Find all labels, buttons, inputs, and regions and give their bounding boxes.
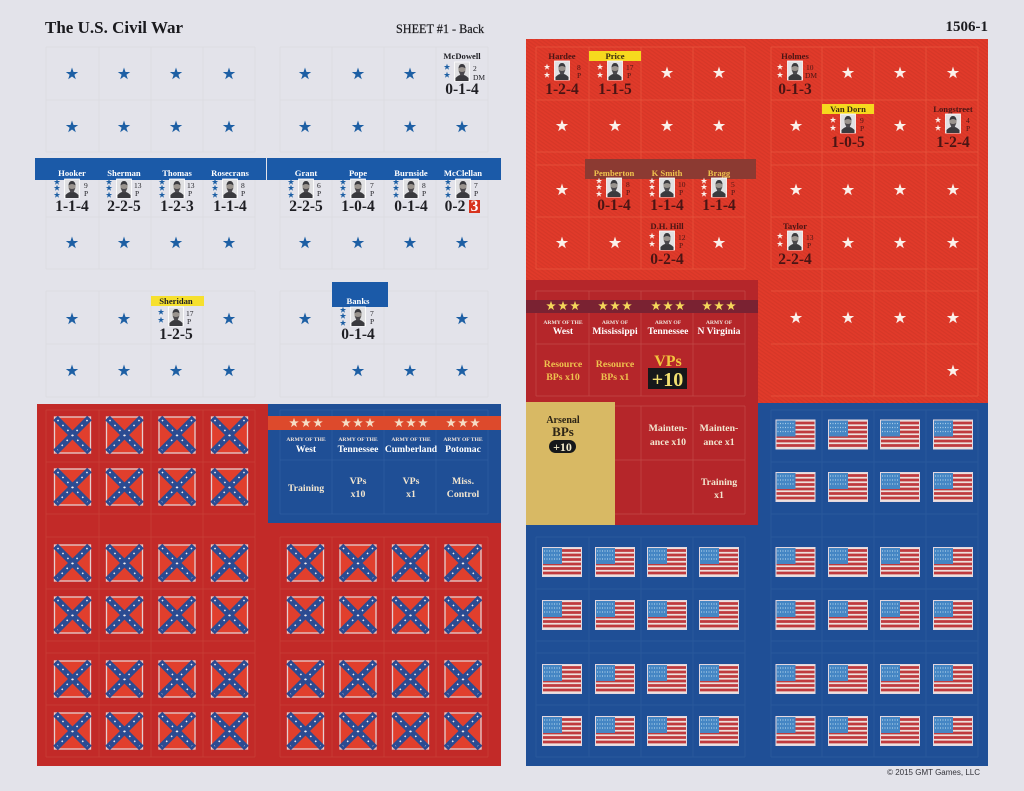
army column: Potomac [443, 418, 483, 500]
leader: Pemberton [594, 168, 635, 214]
Sheridan yellow banner [151, 296, 204, 306]
leader: Price: 1-1-5 [598, 81, 632, 98]
leader: Longstreet: 4 [966, 116, 970, 125]
leader: Sherman: 13 [134, 181, 142, 190]
leader: Rosecrans: Rosecrans [211, 168, 250, 178]
army column: West [543, 301, 583, 383]
leader: D.H. Hill [649, 221, 686, 268]
leader: Burnside: Burnside [394, 168, 428, 178]
army column: N Virginia: ARMY OF [706, 320, 733, 326]
army column: Potomac: ARMY OF THE [443, 437, 483, 443]
white star field [556, 66, 959, 376]
brown name band [585, 159, 756, 179]
Training x1 box: Training [701, 477, 737, 488]
leader: Van Dorn: 9 [860, 116, 864, 125]
Price yellow banner [589, 51, 641, 61]
panel: Confederate red leader counters [526, 39, 988, 404]
army column: Tennessee: VPs [350, 476, 367, 487]
leader: Pope [340, 168, 375, 215]
leader: Sherman [106, 168, 142, 215]
flag group: lower right [288, 545, 481, 749]
leader: Hooker: P [84, 189, 88, 198]
army column: West: BPs x10 [546, 372, 580, 383]
leader: Sheridan [158, 296, 194, 343]
Maintenance x1 box: ance x1 [703, 437, 735, 448]
leader: Taylor: P [807, 241, 811, 250]
leader: Burnside: 8 [422, 181, 426, 190]
flag group: top four by two [54, 417, 248, 505]
leader: McDowell: 2 [473, 64, 477, 73]
leader: McDowell: McDowell [443, 51, 481, 61]
army column: Tennessee: +10 [652, 369, 683, 391]
army column: Mississippi [592, 301, 638, 383]
leader: Sheridan: 1-2-5 [159, 326, 193, 343]
leader: Holmes [777, 51, 817, 98]
leader: Grant: P [317, 189, 321, 198]
copyright: © 2015 GMT Games, LLC [887, 768, 980, 777]
leader: Hardee [544, 51, 581, 98]
leader: Banks: 0-1-4 [341, 326, 375, 343]
panel: Confederate flags [37, 404, 501, 766]
leader: Grant: 6 [317, 181, 321, 190]
army column: Mississippi: Resource [596, 359, 635, 370]
panel: Arsenal tan counter [526, 402, 615, 525]
leader: Sheridan: Sheridan [159, 296, 193, 306]
leader: Thomas: 1-2-3 [160, 198, 194, 215]
panel: Confederate army markers [526, 280, 758, 525]
sheet number: 1506-1 [946, 19, 988, 35]
panel: Arsenal tan counter: BPs [552, 424, 574, 439]
leader: Sheridan: 17 [186, 309, 194, 318]
blue name banner left [35, 158, 266, 180]
leader: Longstreet [933, 104, 973, 151]
army column: West: Resource [544, 359, 583, 370]
leader: Longstreet: Longstreet [933, 104, 973, 114]
leader: Sheridan: P [187, 317, 191, 326]
Maintenance x1 box: Mainten- [700, 423, 738, 434]
army column: Potomac: Potomac [445, 444, 482, 455]
leader: Taylor [777, 221, 814, 268]
leader: Taylor: 13 [806, 233, 814, 242]
leader: Pope: 7 [370, 181, 374, 190]
leader: McClellan: 3 [471, 198, 479, 215]
leader: Price: Price [605, 51, 625, 61]
title: The U.S. Civil War [45, 18, 184, 37]
army column: Potomac: Control [447, 489, 480, 500]
leader: Bragg [701, 168, 736, 214]
Training x1 box [701, 477, 737, 501]
panel: Union leader counters [35, 47, 501, 397]
leader: Bragg: Bragg [708, 168, 731, 178]
army column: Tennessee [648, 301, 689, 391]
army column: Cumberland: ARMY OF THE [391, 437, 431, 443]
leader: Bragg: P [731, 188, 735, 197]
leader: Price: P [627, 71, 631, 80]
panel: Union army markers [268, 404, 501, 523]
leader: Pope: Pope [349, 168, 367, 178]
army column: Tennessee: Tennessee [648, 326, 689, 337]
leader: Holmes: 0-1-3 [778, 81, 812, 98]
panel: Arsenal tan counter: +10 [553, 440, 572, 454]
leader: Pemberton: Pemberton [594, 168, 635, 178]
leader: Bragg: 1-1-4 [702, 197, 736, 214]
leader: Holmes: 10 [806, 63, 814, 72]
leader: McDowell: 0-1-4 [445, 81, 479, 98]
leader: K Smith [649, 168, 686, 214]
leader: Hooker: Hooker [58, 168, 86, 178]
leader: Price: 17 [626, 63, 634, 72]
army column: Tennessee: Tennessee [338, 444, 379, 455]
leader: Pemberton: P [626, 188, 630, 197]
leader: Grant: 2-2-5 [289, 198, 323, 215]
leader: Banks: 7 [370, 309, 374, 318]
leader: Thomas: 13 [187, 181, 195, 190]
Banks banner [332, 282, 388, 307]
leader: Banks: Banks [347, 296, 370, 306]
leader: K Smith: 10 [678, 180, 686, 189]
army column: West: West [296, 444, 317, 455]
army column: West: West [553, 326, 574, 337]
leader: McClellan: 0-2 [445, 198, 466, 215]
army column: Cumberland: Cumberland [385, 444, 438, 455]
leader: Van Dorn: Van Dorn [830, 104, 866, 114]
leader: Burnside: 0-1-4 [394, 198, 428, 215]
leader: Burnside [393, 168, 428, 215]
leader: Bragg: 5 [731, 180, 735, 189]
leader: Van Dorn: 1-0-5 [831, 134, 865, 151]
leader: McClellan: McClellan [444, 168, 482, 178]
army column: Tennessee: ARMY OF THE [338, 437, 378, 443]
sheet label: SHEET #1 - Back [396, 22, 485, 36]
leader: Hooker: 9 [84, 181, 88, 190]
army column: N Virginia [698, 301, 741, 337]
leader: Thomas: P [188, 189, 192, 198]
leader: D.H. Hill: 0-2-4 [650, 251, 684, 268]
leader: Hooker [54, 168, 89, 215]
leader: Pope: P [370, 189, 374, 198]
leader: Taylor: Taylor [783, 221, 807, 231]
header [45, 18, 988, 37]
Training x1 box: x1 [714, 490, 724, 501]
army column: West: ARMY OF THE [286, 437, 326, 443]
flag group: lower left [542, 548, 738, 746]
panel: Arsenal tan counter: Arsenal [546, 415, 580, 426]
leader: Sherman: Sherman [107, 168, 141, 178]
leader: K Smith: 1-1-4 [650, 197, 684, 214]
army column: Cumberland: VPs [403, 476, 420, 487]
army column: Cumberland [385, 418, 438, 500]
army column: Mississippi: BPs x1 [601, 372, 629, 383]
army column: Potomac: Miss. [452, 476, 475, 487]
army column: Cumberland: x1 [406, 489, 416, 500]
leader: Hardee: 8 [577, 63, 581, 72]
leader: K Smith: K Smith [652, 168, 683, 178]
army column: Tennessee [338, 418, 379, 500]
leader: Burnside: P [422, 189, 426, 198]
leader: Thomas [159, 168, 195, 215]
army column: West [286, 418, 326, 494]
Maintenance x10 box: Mainten- [649, 423, 687, 434]
Maintenance x10 box [649, 423, 687, 448]
leader: Longstreet: P [966, 124, 970, 133]
leader: McDowell: DM [473, 73, 485, 82]
leader: Pemberton: 0-1-4 [597, 197, 631, 214]
flag group: lower left [54, 545, 248, 749]
leader: Van Dorn [830, 104, 866, 151]
army column: Tennessee: ARMY OF [655, 320, 682, 326]
blue star field [66, 68, 468, 376]
leader: Banks [340, 296, 375, 343]
flag group: lower right [776, 548, 972, 746]
leader: Hardee: Hardee [548, 51, 576, 61]
leader: Rosecrans: P [241, 189, 245, 198]
leader: Longstreet: 1-2-4 [936, 134, 970, 151]
leader: Hardee: 1-2-4 [545, 81, 579, 98]
leader: Sherman: 2-2-5 [107, 198, 141, 215]
leader: Hooker: 1-1-4 [55, 198, 89, 215]
panel: US flags [526, 403, 988, 766]
leader: D.H. Hill: D.H. Hill [650, 221, 684, 231]
Maintenance x1 box [700, 423, 738, 448]
leader: D.H. Hill: P [679, 241, 683, 250]
army column: Mississippi: ARMY OF [602, 320, 629, 326]
leader: Price [597, 51, 634, 98]
leader: Hardee: P [577, 71, 581, 80]
leader: Holmes: Holmes [781, 51, 809, 61]
leader: Rosecrans: 1-1-4 [213, 198, 247, 215]
leader: McClellan: 7 [474, 181, 478, 190]
red star stripe [268, 416, 501, 430]
leader: Rosecrans [211, 168, 250, 215]
leader: Holmes: DM [805, 71, 817, 80]
leader: McClellan [444, 168, 482, 215]
leader: K Smith: P [679, 188, 683, 197]
Van Dorn yellow banner [822, 104, 874, 114]
leader: D.H. Hill: 12 [678, 233, 686, 242]
army column: Tennessee: x10 [351, 489, 365, 500]
army column: West: ARMY OF THE [543, 320, 583, 326]
flag group: top right [776, 420, 972, 502]
leader: Pemberton: 8 [626, 180, 630, 189]
Maintenance x10 box: ance x10 [650, 437, 686, 448]
army column: Mississippi: Mississippi [592, 326, 638, 337]
leader: Sherman: P [135, 189, 139, 198]
leader: Taylor: 2-2-4 [778, 251, 812, 268]
army column: West: Training [288, 483, 324, 494]
army column: N Virginia: N Virginia [698, 326, 741, 337]
army column: Tennessee: VPs [654, 353, 682, 370]
leader: Thomas: Thomas [162, 168, 192, 178]
leader: Banks: P [370, 317, 374, 326]
maroon star stripe [526, 300, 758, 313]
leader: Rosecrans: 8 [241, 181, 245, 190]
leader: McDowell [443, 51, 485, 98]
leader: Van Dorn: P [860, 124, 864, 133]
blue name banner right [267, 158, 501, 180]
leader: Grant [288, 168, 323, 215]
leader: McClellan: P [474, 189, 478, 198]
leader: Grant: Grant [295, 168, 317, 178]
leader: Pope: 1-0-4 [341, 198, 375, 215]
